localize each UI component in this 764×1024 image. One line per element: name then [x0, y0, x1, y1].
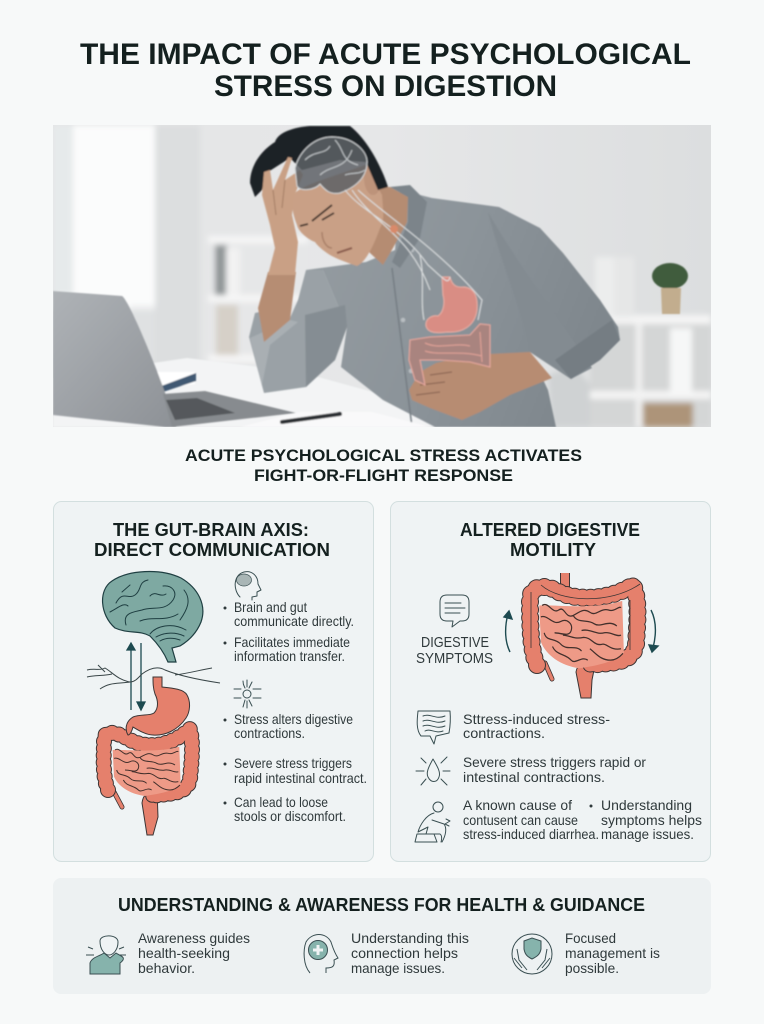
text: understanding: manage issues. — [351, 960, 445, 976]
icon: hands holding shield — [512, 934, 552, 974]
bullets: stress effects — [224, 711, 367, 824]
nerves — [87, 665, 220, 689]
panel heading: UNDERSTANDING & AWARENESS FOR HEALTH & GUIDANCE — [118, 894, 645, 915]
text: stress-induced contractions: contractions. — [463, 725, 545, 741]
text: understanding: connection helps — [351, 945, 458, 961]
text: severe stress — [463, 754, 646, 785]
bullets: brain and gut: information transfer. — [234, 648, 345, 664]
text: understanding — [351, 930, 469, 976]
text: awareness: health-seeking — [138, 945, 230, 961]
text: understanding symptoms: Understanding — [601, 797, 692, 813]
icon: person seated — [415, 802, 450, 842]
small intestine — [113, 747, 181, 796]
text: stress-induced contractions: Sttress-induced stress- — [463, 711, 610, 727]
text: known cause: stress-induced diarrhea. — [463, 826, 599, 842]
bullets: brain and gut: communicate directly. — [234, 613, 354, 629]
text: focused: management is — [565, 945, 660, 961]
title — [80, 38, 691, 103]
text: focused: Focused — [565, 930, 616, 946]
laptop base — [163, 391, 296, 427]
subtitle — [185, 446, 582, 485]
icon: brain illustration — [103, 572, 203, 662]
bullets: stress effects: Can lead to loose — [234, 794, 328, 810]
icon: drop with arrows — [416, 757, 450, 785]
label: digestive symptoms: DIGESTIVE — [421, 634, 489, 651]
large intestine illustration — [530, 573, 640, 698]
bullets: stress effects: Stress alters digestive — [234, 711, 353, 727]
text: severe stress: Severe stress triggers rapid or — [463, 754, 646, 770]
icon: person with awareness — [86, 936, 126, 974]
text: stress-induced contractions — [463, 711, 610, 741]
text: known cause: A known cause of — [463, 797, 572, 813]
forearm — [258, 272, 296, 342]
laptop lid — [53, 291, 176, 427]
stomach and intestines illustration — [104, 677, 192, 835]
panel heading: THE GUT-BRAIN AXIS: — [113, 520, 309, 540]
title: THE IMPACT OF ACUTE PSYCHOLOGICAL — [80, 38, 691, 71]
collar — [390, 185, 427, 268]
text: awareness — [138, 930, 250, 976]
panel heading — [460, 520, 640, 560]
arrow: motility down — [649, 610, 658, 652]
icon: head with medical cross — [304, 934, 338, 973]
arrows: brain to gut — [127, 643, 145, 710]
chair — [548, 372, 590, 427]
hair — [250, 126, 388, 197]
appendix — [114, 792, 122, 807]
bullets: brain and gut: Brain and gut — [234, 599, 307, 615]
hand on head — [262, 157, 303, 275]
bullets: stress effects: rapid intestinal contract. — [234, 770, 367, 786]
plant — [652, 263, 688, 314]
overlay intestines — [409, 324, 490, 385]
bullets: stress effects: stools or discomfort. — [234, 808, 346, 824]
icon: intestine outline — [417, 711, 450, 744]
arrow: motility up — [504, 611, 512, 652]
text: awareness: Awareness guides — [138, 930, 250, 946]
subtitle: FIGHT-OR-FLIGHT RESPONSE — [254, 466, 513, 485]
colon — [104, 729, 192, 796]
overlay nerves — [345, 190, 482, 320]
panel: gut-brain axis — [54, 502, 374, 862]
subtitle: ACUTE PSYCHOLOGICAL STRESS ACTIVATES — [185, 446, 582, 465]
rectum — [576, 660, 596, 698]
sleeve: left arm — [249, 270, 347, 393]
lower hand — [409, 352, 552, 420]
photo: stressed man holding head and stomach — [53, 125, 711, 427]
panel heading: ALTERED DIGESTIVE — [460, 520, 640, 540]
shelves left — [208, 236, 308, 366]
face — [292, 165, 383, 266]
shelves right — [590, 315, 711, 427]
bullets: brain and gut — [224, 599, 354, 664]
neck — [368, 186, 408, 265]
colon — [530, 585, 638, 665]
sleeve: right arm shading — [574, 366, 592, 378]
pen and notebook — [278, 412, 414, 427]
text: understanding symptoms — [590, 797, 702, 842]
bullets: stress effects: Severe stress triggers — [234, 755, 352, 771]
text: focused — [565, 930, 660, 976]
icon: nerve burst — [234, 680, 261, 708]
text: focused: possible. — [565, 960, 619, 976]
panel heading — [94, 520, 330, 560]
text: awareness: behavior. — [138, 960, 195, 976]
text: severe stress: intestinal contractions. — [463, 769, 605, 785]
bullets: stress effects: contractions. — [234, 725, 305, 741]
placket and buttons — [392, 268, 412, 427]
label: digestive symptoms: SYMPTOMS — [416, 650, 493, 667]
man torso — [306, 190, 620, 427]
text: known cause — [463, 797, 599, 842]
stomach — [126, 677, 190, 735]
text: understanding: Understanding this — [351, 930, 469, 946]
icon: speech bubble — [440, 595, 469, 627]
ear — [364, 161, 382, 195]
overlay brain — [295, 137, 367, 193]
esophagus stub — [560, 573, 570, 590]
label: digestive symptoms — [416, 634, 493, 667]
panel: altered digestive motility — [390, 502, 710, 862]
rectum — [142, 790, 158, 835]
panel heading: MOTILITY — [510, 540, 596, 560]
icon: head with brain — [235, 572, 261, 600]
overlay stomach — [426, 277, 477, 333]
bullets: brain and gut: Facilitates immediate — [234, 634, 350, 650]
appendix — [545, 663, 552, 679]
text: understanding symptoms: manage issues. — [601, 826, 694, 842]
title: STRESS ON DIGESTION — [214, 70, 557, 103]
desk — [53, 358, 433, 427]
text: known cause: contusent can cause — [463, 812, 578, 828]
small intestine — [539, 601, 624, 668]
text: understanding symptoms: symptoms helps — [601, 812, 702, 828]
panel: understanding and awareness — [53, 878, 711, 994]
panel heading: DIRECT COMMUNICATION — [94, 540, 330, 560]
